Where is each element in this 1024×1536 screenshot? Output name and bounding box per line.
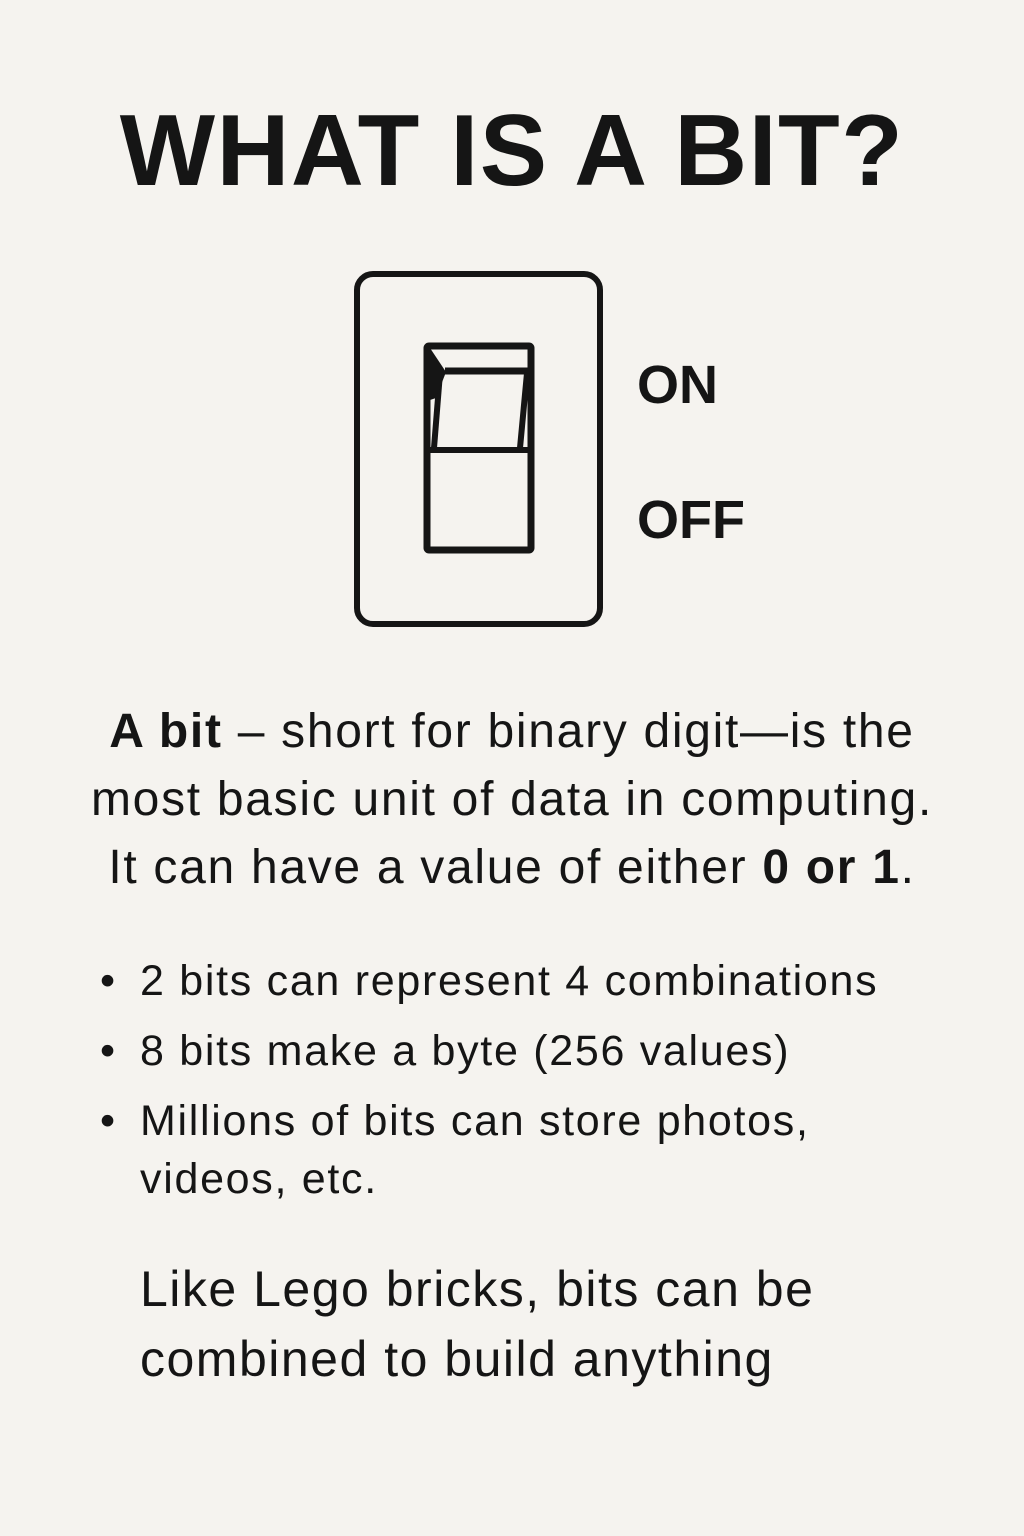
definition text: most basic unit of data in computing. — [91, 773, 933, 826]
title: WHAT IS A BIT? — [120, 95, 904, 207]
definition text: A bit – short for binary digit—is the — [109, 705, 915, 758]
bullet list: videos, etc. — [140, 1155, 378, 1203]
label: OFF: OFF — [637, 490, 745, 550]
closing analogy: combined to build anything — [140, 1331, 774, 1387]
bullet list — [102, 957, 878, 1203]
closing analogy — [140, 1261, 814, 1387]
closing analogy: Like Lego bricks, bits can be — [140, 1261, 814, 1317]
label: ON: ON — [637, 355, 718, 415]
definition text — [91, 705, 933, 894]
bullet list: 8 bits make a byte (256 values) — [140, 1027, 790, 1075]
definition text: It can have a value of either 0 or 1. — [108, 841, 916, 894]
bullet list: Millions of bits can store photos, — [140, 1097, 810, 1145]
bullet list: 2 bits can represent 4 combinations — [140, 957, 878, 1005]
icon: light switch — [354, 271, 603, 627]
